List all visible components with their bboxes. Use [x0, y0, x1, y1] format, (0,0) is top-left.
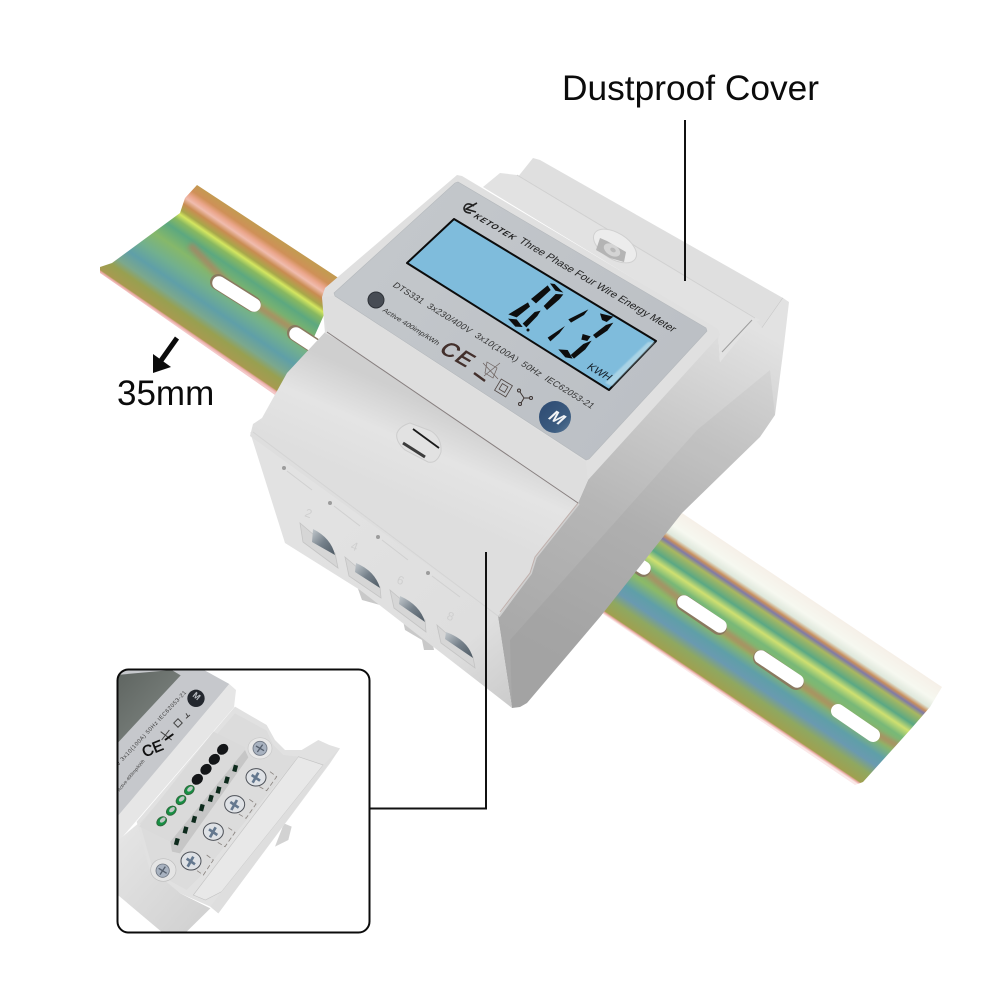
- inset plate: CE: [140, 737, 166, 761]
- top latch: [588, 222, 642, 270]
- lcd screen: [407, 219, 656, 390]
- lower top face with front latch: [250, 330, 578, 616]
- terminal block: [156, 732, 248, 854]
- embossed terminal numbers: 6: [395, 573, 406, 588]
- mounting foot clips: [357, 586, 434, 650]
- panel: terminal inset: [115, 670, 370, 933]
- embossed terminal numbers: 8: [445, 609, 456, 624]
- leader line to inset: [370, 552, 486, 808]
- front face with terminals: [250, 432, 512, 708]
- terminal screws: [181, 769, 277, 875]
- inset plate: V 3x10(100A) 50Hz IEC62053-21: [115, 690, 188, 767]
- display block bezel: [322, 175, 720, 480]
- front latch: [397, 423, 441, 462]
- label plate: [334, 182, 707, 460]
- energy meter: [250, 158, 789, 708]
- heading: dustproof cover: Dustproof Cover: [562, 69, 819, 108]
- terminal openings: [300, 523, 475, 668]
- pulse constant: Active 400imp/kWh: [381, 308, 441, 347]
- dimension arrow: [153, 338, 177, 373]
- din rail: left section: [100, 185, 345, 402]
- inset body: [117, 823, 210, 933]
- embossed terminal numbers: 4: [349, 539, 360, 554]
- dimension label: 35mm: 35mm: [117, 374, 214, 413]
- inset tray and cover flap: [137, 707, 340, 913]
- embossed terminal numbers: [303, 506, 456, 624]
- lcd digits 0.13: [508, 283, 613, 359]
- icon: wiring symbol: [518, 389, 532, 406]
- leader line to dustproof cover: [684, 120, 686, 281]
- icon: weee bin: [474, 362, 500, 381]
- brand logo: [464, 203, 519, 242]
- product name: Three Phase Four Wire Energy Meter: [516, 236, 679, 335]
- brand logo: KETOTEK: [472, 212, 519, 242]
- icon: double insulation: [495, 379, 512, 397]
- inset plate: [115, 670, 236, 842]
- inset plate: Active 400imp/kWh: [116, 758, 146, 792]
- mounting screws: [151, 738, 272, 881]
- embossed terminal numbers: 2: [303, 506, 314, 521]
- din rail: right section: [600, 513, 942, 785]
- rear housing with dustproof cover: [483, 158, 783, 362]
- indicator led: [368, 292, 384, 308]
- side face: [498, 298, 789, 708]
- mid certification badge: [539, 401, 571, 433]
- ce mark: CE: [434, 337, 482, 372]
- inset plate: M: [191, 690, 203, 702]
- mid certification badge: M: [544, 408, 570, 428]
- specification line: DTS331 3x230/400V 3x10(100A) 50Hz IEC62053-21: [391, 281, 597, 410]
- kwh unit: KWH: [584, 362, 615, 383]
